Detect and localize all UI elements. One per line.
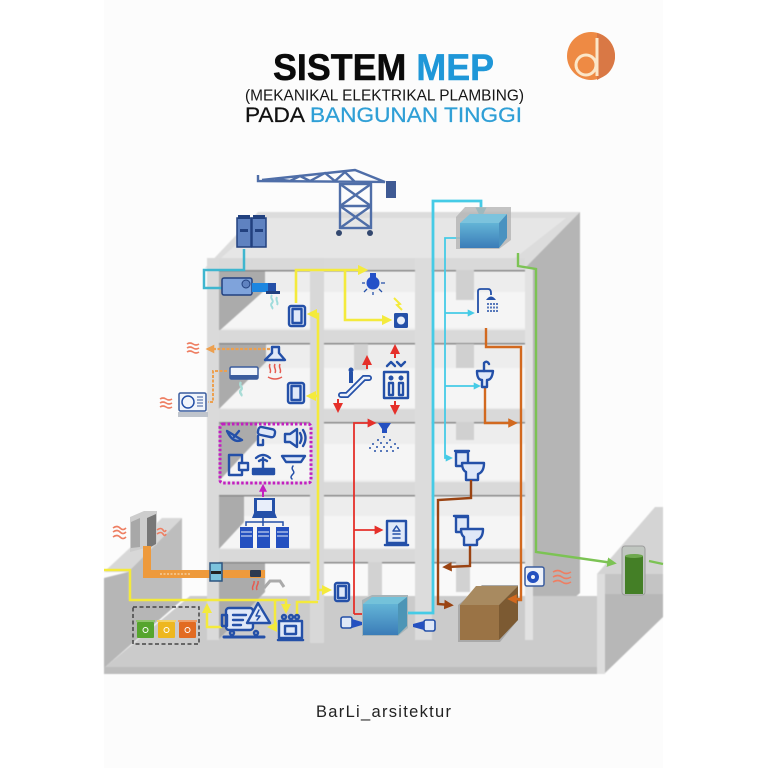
septic tank xyxy=(458,585,518,642)
bin green xyxy=(136,620,155,638)
right pit block xyxy=(597,507,663,674)
icon: fire control panel xyxy=(385,521,408,545)
icon: heat waves left xyxy=(113,526,126,538)
icon: ventilation box xyxy=(130,511,157,552)
left block front face xyxy=(104,572,182,668)
icon: heat waves fan xyxy=(553,570,571,584)
ground xyxy=(104,596,598,674)
floor slabs xyxy=(207,258,525,562)
icon: escalator xyxy=(341,368,369,395)
icon: pump left xyxy=(341,617,362,628)
building back wall xyxy=(207,258,525,598)
right side wall xyxy=(525,212,580,640)
shaded floor triangles xyxy=(218,270,266,640)
heading: sistem mep: SISTEM MEP xyxy=(273,47,494,88)
icon: electrical panel upper xyxy=(289,306,305,326)
icon: shower xyxy=(478,289,497,313)
roof xyxy=(205,212,580,268)
icon: exhaust fan xyxy=(525,567,544,586)
arrow: network link xyxy=(262,487,264,497)
pipe: chilled water loop xyxy=(204,249,244,288)
icon: generator xyxy=(222,603,270,637)
pipes: clean water xyxy=(406,201,481,613)
subheading: pada bangunan tinggi: PADA BANGUNAN TINGGI xyxy=(245,104,522,127)
duct: generator exhaust xyxy=(143,546,265,578)
icon: air conditioner xyxy=(230,367,258,379)
clean water cistern xyxy=(362,595,408,636)
dashed frame xyxy=(133,607,199,644)
dotted frame xyxy=(220,424,311,483)
ground front edge xyxy=(104,667,598,674)
icon: transformer xyxy=(278,615,303,640)
pipes: black water brown xyxy=(438,480,471,605)
pipes: yellow electrical upper xyxy=(296,270,388,600)
title xyxy=(245,47,524,127)
icon: toilet lower xyxy=(454,516,483,545)
slab edges xyxy=(219,270,525,564)
icon: flame and cables xyxy=(252,581,284,590)
red direction arrows xyxy=(338,348,395,411)
icon: satellite dish xyxy=(227,431,242,441)
icon: heat waves upper xyxy=(187,343,199,353)
bin yellow xyxy=(157,620,176,638)
icon: cool air wave lower xyxy=(240,382,242,396)
septic cylinder xyxy=(622,546,645,595)
footer credit: BarLi_arsitektur xyxy=(316,703,452,721)
icon: damper xyxy=(210,563,222,581)
icon: damper end xyxy=(250,570,261,577)
columns xyxy=(207,258,533,643)
panel: low voltage systems xyxy=(220,424,311,483)
pipes: fire protection xyxy=(354,423,380,614)
icon: cctv camera xyxy=(257,426,276,445)
pipe: vent green xyxy=(518,253,663,564)
icon: pump right xyxy=(413,620,435,631)
icon: chillers xyxy=(237,215,266,247)
background panel xyxy=(104,0,663,768)
icon: outdoor unit xyxy=(178,393,208,417)
left low block xyxy=(104,518,182,600)
icon: electrical panel lower xyxy=(288,383,304,403)
icon: cool air wave xyxy=(271,295,278,309)
icon: laptop and servers xyxy=(240,498,289,548)
icon: lamp xyxy=(362,273,385,295)
exhaust duct xyxy=(209,348,270,350)
icon: air handling unit xyxy=(222,278,280,295)
crane xyxy=(258,170,396,236)
icon: socket xyxy=(394,313,408,328)
building structure xyxy=(104,212,663,674)
floor bands xyxy=(219,292,525,596)
icon: toilet upper xyxy=(455,451,484,480)
pipes: yellow main power xyxy=(104,570,328,627)
icon: lightning xyxy=(394,298,402,310)
icon: logo xyxy=(567,32,615,80)
icon: sink xyxy=(477,362,493,387)
subheading: mekanikal elektrikal plambing: (MEKANIKAL ELEKTRIKAL PLAMBING) xyxy=(245,88,524,104)
refrigerant pipe xyxy=(208,371,227,402)
panel: waste bins xyxy=(133,607,199,644)
icon: heat waves vent xyxy=(157,528,166,536)
arrow: septic inlet xyxy=(511,598,520,600)
icon: sprinkler xyxy=(370,423,398,452)
water tank xyxy=(456,207,511,249)
icon: door access xyxy=(229,455,248,475)
icon: speaker xyxy=(285,429,306,447)
bin orange xyxy=(178,620,197,638)
icon: heat waves outdoor xyxy=(160,398,172,408)
pipes: grey water orange xyxy=(485,328,521,600)
icon: electrical panel ground xyxy=(335,583,349,601)
icon: wifi router xyxy=(253,455,274,474)
icon: cooker hood xyxy=(265,347,285,360)
icon: elevator xyxy=(384,362,408,398)
icon: smoke detector xyxy=(282,456,305,479)
icon: steam xyxy=(268,364,282,379)
